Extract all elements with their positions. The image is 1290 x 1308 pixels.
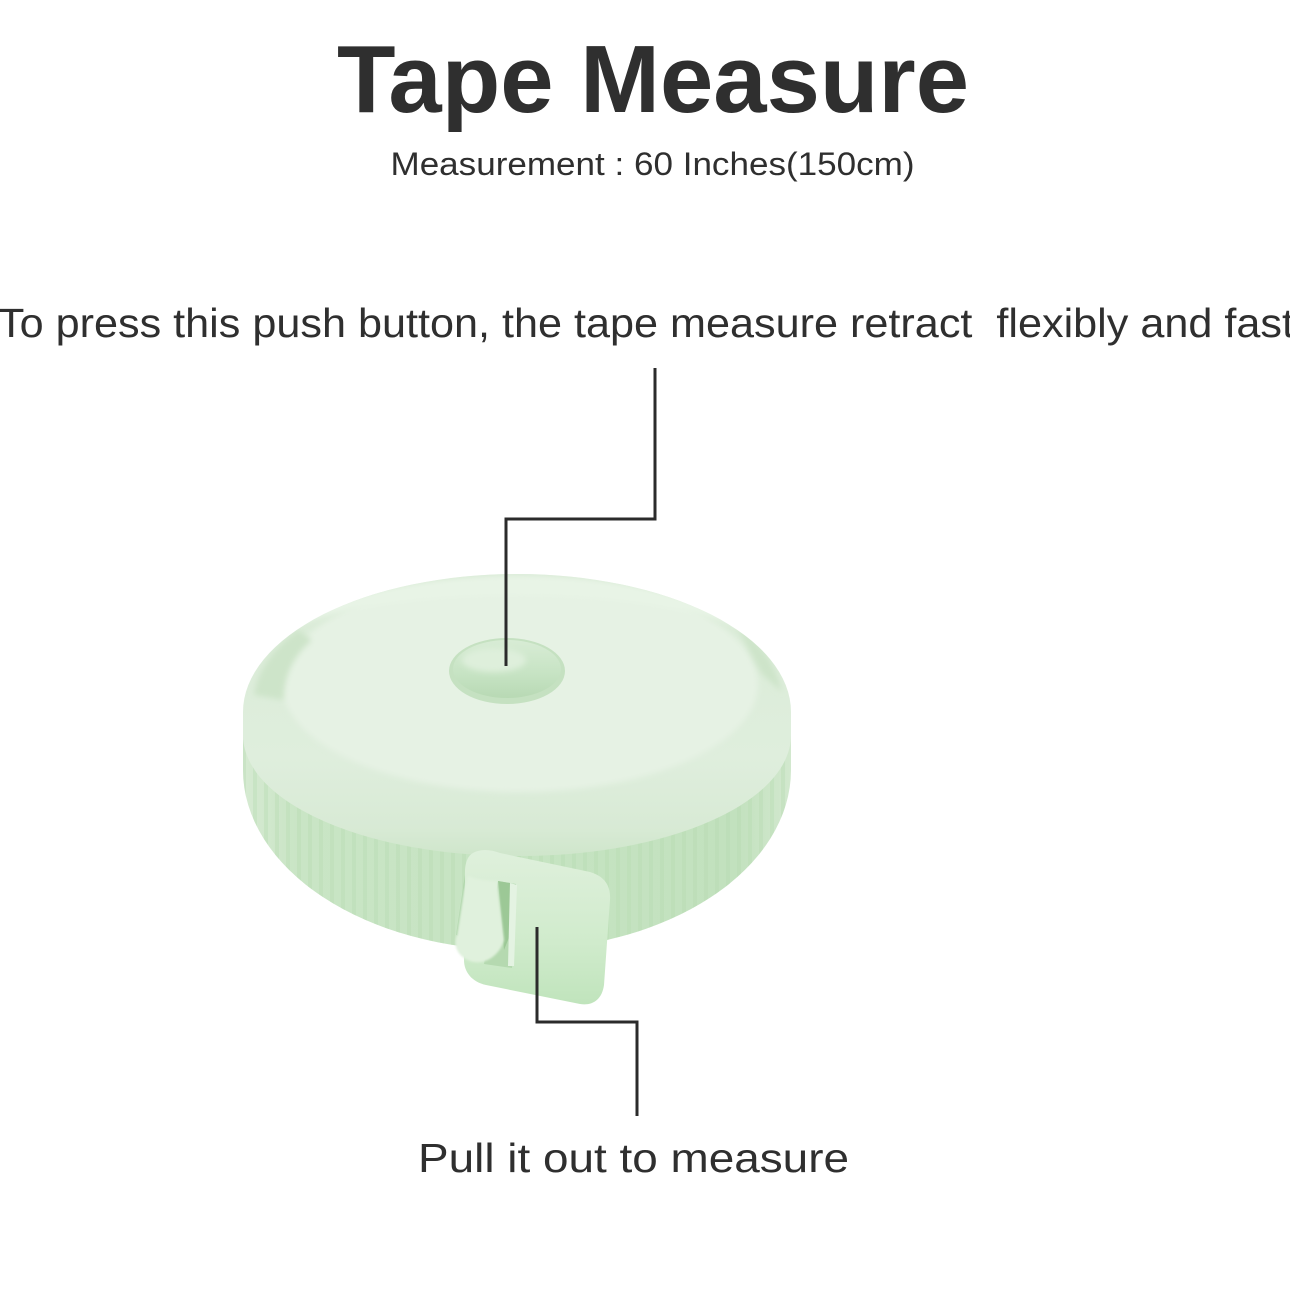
device lid xyxy=(243,574,791,856)
arrow: pull tab leader line xyxy=(537,927,637,1116)
title: Tape Measure xyxy=(337,26,969,133)
subtitle: measurement: Measurement : 60 Inches(150cm) xyxy=(390,146,914,182)
callout: push button text: To press this push button, the tape measure retract flexibly and fast xyxy=(0,300,1290,346)
illustration: tape measure device xyxy=(243,574,791,1004)
pull tab xyxy=(456,850,610,1004)
arrow: button leader line xyxy=(506,368,655,666)
callout: pull tab text: Pull it out to measure xyxy=(418,1135,849,1181)
push button xyxy=(449,638,565,704)
device body with ribbed side xyxy=(243,735,791,950)
